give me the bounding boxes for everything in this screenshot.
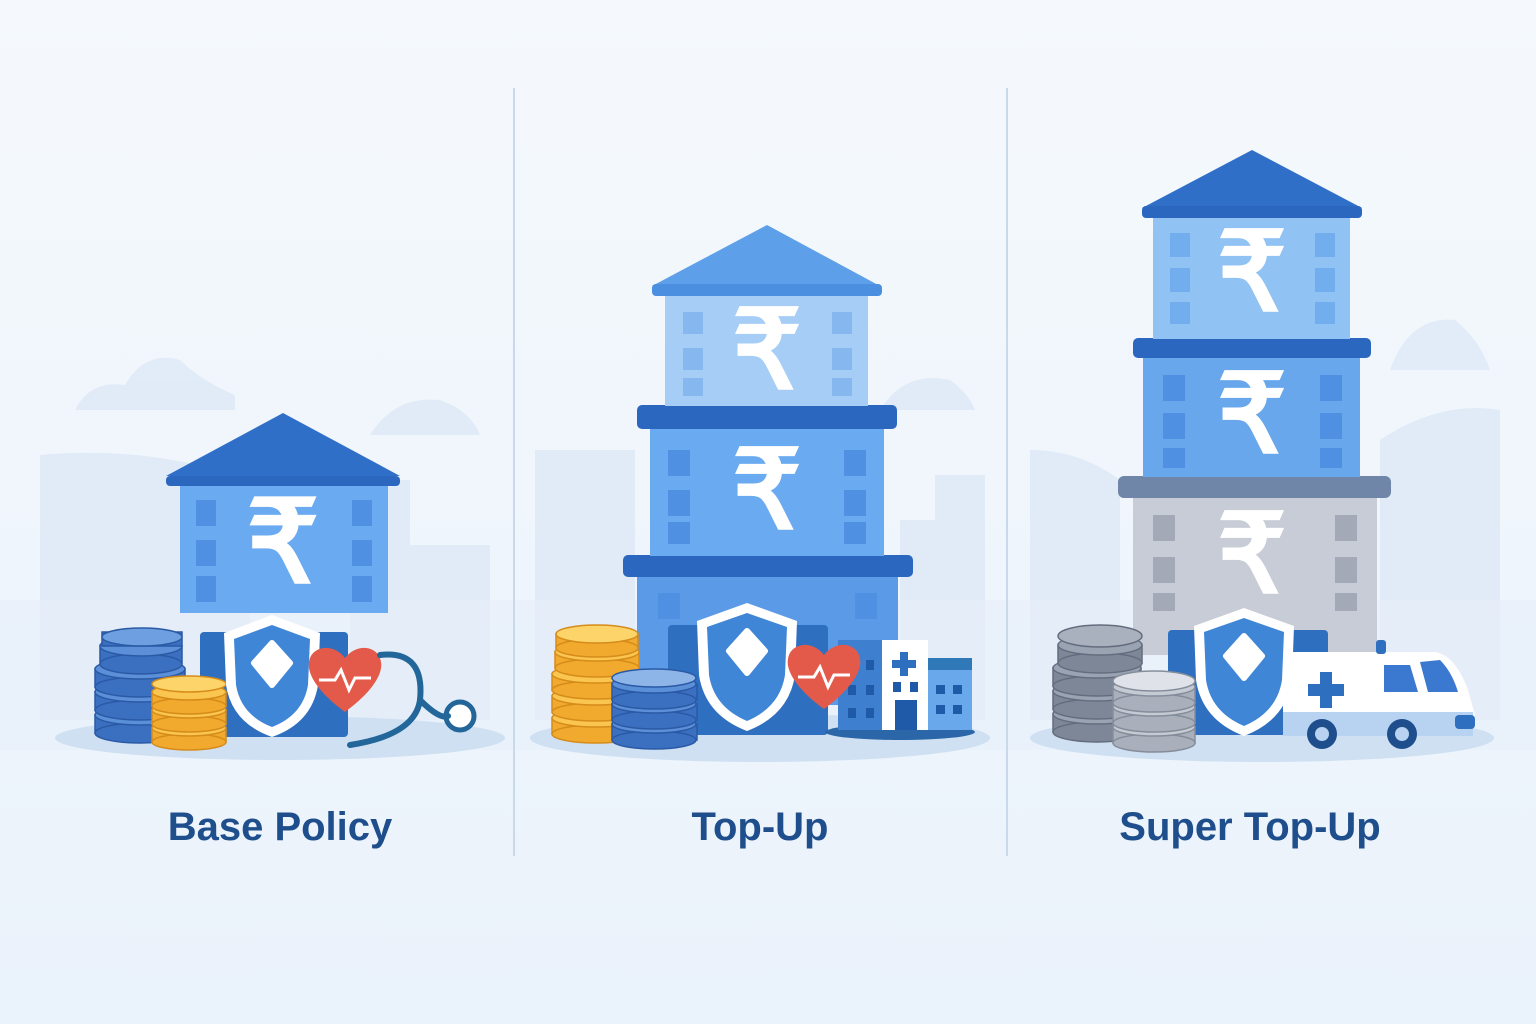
panel: top-up: [530, 225, 990, 849]
building: three tiers with grey base: ₹: [1217, 211, 1287, 334]
icon: hospital: [825, 640, 975, 740]
icon: coin stacks grey: [1053, 625, 1195, 752]
background skyline: [40, 320, 1500, 720]
icon: stethoscope: [350, 655, 474, 745]
icon: shield: [697, 603, 797, 731]
building: three tiers: ₹: [732, 429, 802, 552]
icon: heart: [309, 648, 381, 712]
panel: top-up: Top-Up: [692, 805, 828, 849]
icon: ambulance: [1283, 640, 1475, 749]
building: single tier: [166, 413, 400, 613]
icon: shield: [1194, 608, 1294, 736]
building: single tier: ₹: [246, 479, 320, 607]
building: three tiers with grey base: ₹: [1217, 353, 1287, 476]
panel: super top-up: Super Top-Up: [1119, 805, 1381, 849]
icon: coin stacks: [552, 625, 697, 749]
panel: base policy: [55, 413, 505, 849]
building: three tiers: [623, 225, 913, 705]
label: Base Policy: [168, 805, 393, 849]
panel: super top-up: [1030, 150, 1494, 849]
building: three tiers: ₹: [732, 289, 802, 412]
icon: coin stacks: [95, 628, 226, 750]
icon: heart: [788, 645, 860, 709]
dividers: [513, 88, 515, 856]
back folder: [200, 632, 348, 737]
building: three tiers with grey base: [1118, 150, 1391, 655]
ground ellipse: [55, 716, 505, 760]
icon: shield: [224, 615, 320, 737]
building: three tiers with grey base: ₹: [1217, 493, 1287, 616]
